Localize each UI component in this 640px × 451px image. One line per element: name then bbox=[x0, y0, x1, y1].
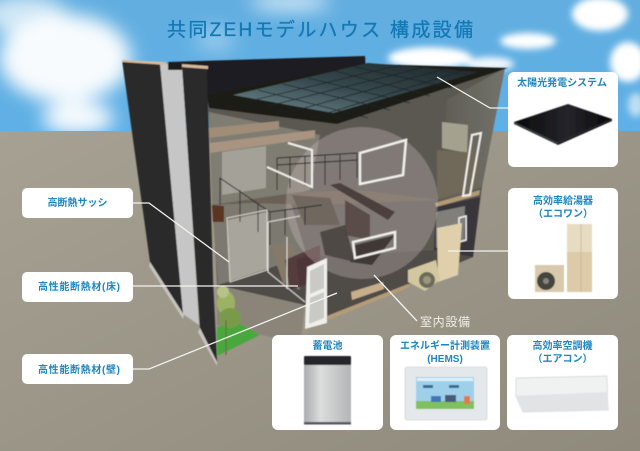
outer wall: base edge bbox=[149, 262, 184, 319]
label card: floor insulation: 高性能断熱材(床) bbox=[38, 280, 120, 293]
water heater on house bbox=[408, 223, 462, 291]
panel: high efficiency air conditioner: 高効率空調機 bbox=[532, 339, 592, 352]
label card: high insulation sash bbox=[22, 188, 133, 218]
panel: storage battery: 蓄電池 bbox=[312, 339, 342, 352]
railings bbox=[220, 153, 357, 245]
panel: high efficiency water heater: （エコワン） bbox=[533, 208, 593, 220]
label: indoor equipment: 室内設備 bbox=[420, 315, 470, 329]
icon: HEMS monitor bbox=[405, 367, 487, 420]
lower left room bbox=[212, 200, 305, 285]
roof bbox=[207, 63, 508, 124]
label card: wall insulation: 高性能断熱材(壁) bbox=[38, 363, 120, 376]
upstairs left room bbox=[209, 112, 320, 205]
house cutaway model bbox=[122, 56, 508, 366]
floor boards edge bbox=[327, 284, 410, 320]
window frames bbox=[227, 133, 481, 302]
interior back wall bbox=[208, 70, 500, 318]
panel: high efficiency water heater: 高効率給湯器 bbox=[533, 194, 593, 207]
leader lines bbox=[133, 77, 508, 369]
back wall top behind roof bbox=[168, 56, 366, 100]
ceiling beams bbox=[209, 121, 279, 138]
lower right dark wall bbox=[433, 197, 480, 268]
panel: storage battery bbox=[272, 335, 383, 430]
panel: solar power system bbox=[508, 72, 618, 167]
panel: high efficiency water heater bbox=[508, 188, 618, 299]
panel: solar power system: 太陽光発電システム bbox=[517, 76, 607, 89]
sky background bbox=[0, 0, 640, 134]
panel: HEMS energy monitor: エネルギー計測装置 bbox=[400, 339, 490, 352]
outer wall: white stripe bbox=[160, 64, 199, 325]
label card: wall insulation bbox=[22, 354, 133, 384]
shadow on ground under open front bbox=[217, 285, 305, 345]
icon: solar panel bbox=[514, 104, 612, 145]
floor bbox=[218, 250, 473, 318]
panel: high efficiency air conditioner bbox=[507, 335, 618, 430]
wall top edges bbox=[122, 60, 166, 65]
translucent circle: indoor equipment zone bbox=[286, 127, 438, 279]
upper right room window bbox=[442, 122, 468, 153]
furniture: kitchen counters bbox=[292, 183, 395, 265]
second floor slab bbox=[212, 190, 440, 205]
icon: air conditioner bbox=[516, 376, 608, 412]
garden with tree bbox=[217, 286, 260, 356]
shutter window bbox=[305, 258, 327, 329]
title: 共同ZEHモデルハウス 構成設備 bbox=[167, 19, 473, 41]
panel: HEMS energy monitor bbox=[390, 335, 500, 430]
outer wall: right black cladding bbox=[182, 66, 217, 362]
label card: high insulation sash: 高断熱サッシ bbox=[48, 196, 108, 209]
ground bbox=[0, 131, 640, 451]
right interior wall bbox=[440, 68, 505, 203]
icon: battery unit bbox=[304, 356, 351, 424]
panel: HEMS energy monitor: (HEMS) bbox=[427, 354, 463, 365]
icon: hot water tank and outdoor unit bbox=[535, 224, 592, 292]
label card: floor insulation bbox=[22, 272, 133, 302]
panel: high efficiency air conditioner: （エアコン） bbox=[532, 353, 592, 365]
outer wall: left black cladding bbox=[122, 60, 184, 315]
